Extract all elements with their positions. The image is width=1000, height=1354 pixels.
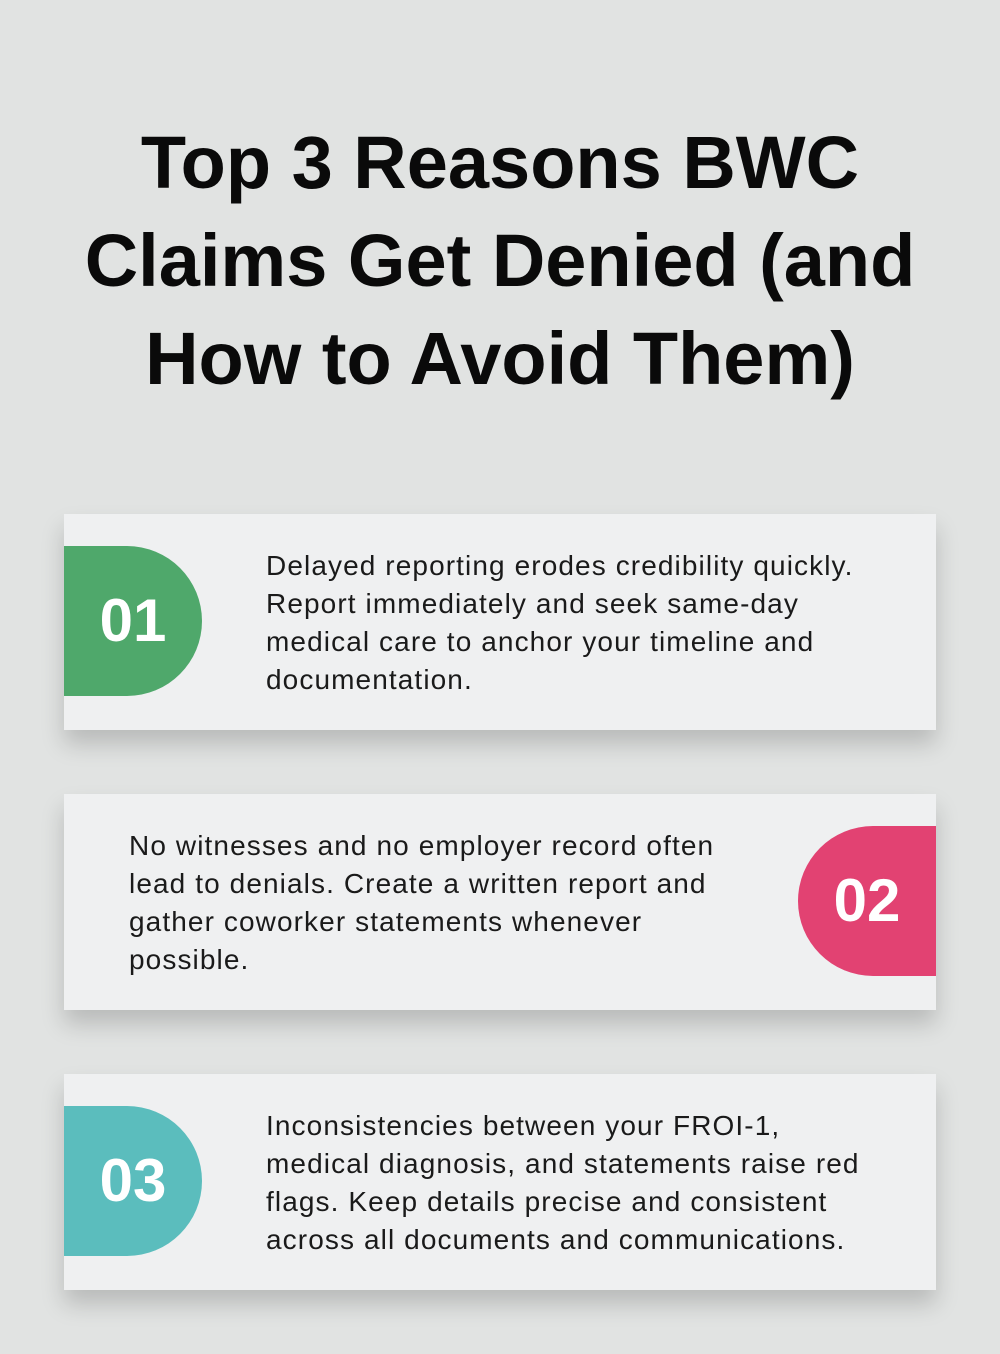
text: reason 1 xyxy=(266,550,853,695)
text: reason 3: Inconsistencies between your FROI-1, xyxy=(266,1110,780,1141)
title xyxy=(85,121,915,400)
text: reason 1: Delayed reporting erodes credibility quickly. xyxy=(266,550,853,581)
title: Claims Get Denied (and xyxy=(85,219,915,302)
title: Top 3 Reasons BWC xyxy=(141,121,859,204)
text: reason 1: Report immediately and seek same-day xyxy=(266,588,799,619)
badge: 03: 03 xyxy=(100,1147,166,1214)
text: reason 2: possible. xyxy=(129,944,249,975)
badge: 02: 02 xyxy=(834,867,900,934)
title: How to Avoid Them) xyxy=(145,317,855,400)
badge: 03 xyxy=(64,1106,202,1256)
text: reason 1: documentation. xyxy=(266,664,473,695)
text: reason 3: flags. Keep details precise and consistent xyxy=(266,1186,827,1217)
text: reason 3: across all documents and communications. xyxy=(266,1224,845,1255)
text: reason 2: No witnesses and no employer record often xyxy=(129,830,714,861)
panel: reason 3 xyxy=(64,1074,936,1290)
text: reason 2: gather coworker statements whenever xyxy=(129,906,642,937)
text: reason 3: medical diagnosis, and statements raise red xyxy=(266,1148,860,1179)
text: reason 2: lead to denials. Create a written report and xyxy=(129,868,707,899)
panel: reason 2 xyxy=(64,794,936,1010)
badge: 01 xyxy=(64,546,202,696)
text: reason 2 xyxy=(129,830,714,975)
text: reason 1: medical care to anchor your timeline and xyxy=(266,626,814,657)
badge: 02 xyxy=(798,826,936,976)
text: reason 3 xyxy=(266,1110,860,1255)
badge: 01: 01 xyxy=(100,587,166,654)
panel: reason 1 xyxy=(64,514,936,730)
